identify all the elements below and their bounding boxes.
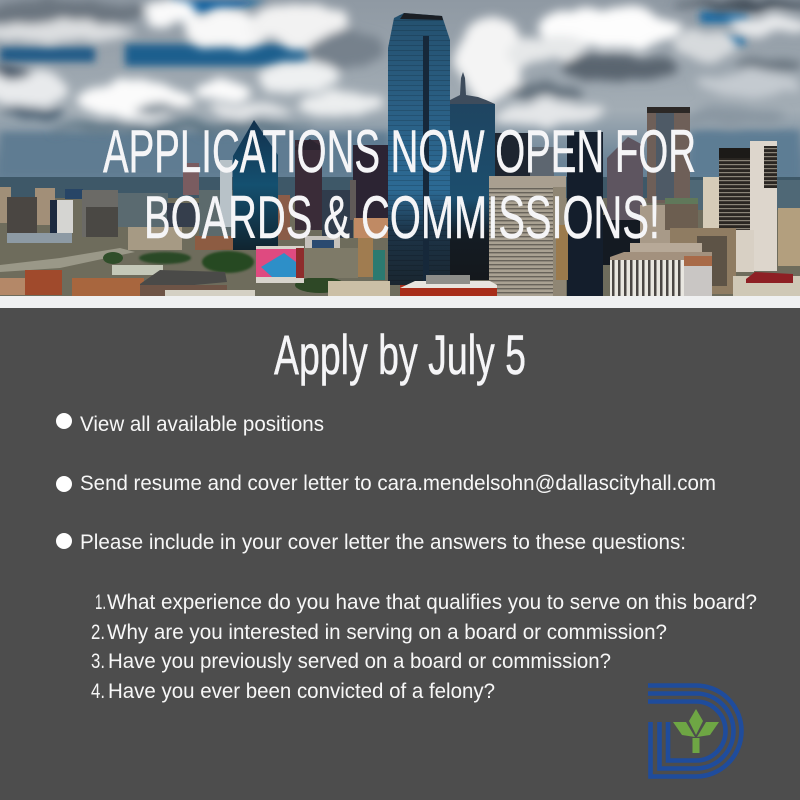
Fountain Place glass tower xyxy=(233,120,278,250)
question 1: 1. xyxy=(95,591,106,614)
distant city haze xyxy=(0,177,800,198)
title xyxy=(103,118,696,251)
logo leaves xyxy=(673,709,719,753)
header photo: Dallas skyline xyxy=(0,0,800,296)
light divider strip xyxy=(0,296,800,308)
tan grid tower xyxy=(489,176,568,296)
white striped tower xyxy=(719,141,800,271)
bullet 3: Please include in your cover letter the answers to these questions: xyxy=(80,531,686,554)
question 3: Have you previously served on a board or commission? xyxy=(108,650,611,673)
numbered questions xyxy=(91,591,757,703)
question 2: 2. xyxy=(91,621,105,644)
logo D stripes xyxy=(648,686,742,776)
red roof buildings xyxy=(400,272,800,296)
main glass tower xyxy=(388,13,450,285)
question 1: What experience do you have that qualifies you to serve on this board? xyxy=(107,591,757,614)
second glass tower with spire xyxy=(450,72,495,280)
question 3: 3. xyxy=(91,650,105,673)
highway and trees xyxy=(0,248,345,293)
question 4: 4. xyxy=(91,680,105,703)
question 2: Why are you interested in serving on a board or commission? xyxy=(107,621,667,644)
left skyline buildings xyxy=(0,160,235,250)
bullet 1: View all available positions xyxy=(80,413,324,436)
tan mid-rise buildings xyxy=(670,228,754,294)
bullet list xyxy=(56,413,716,554)
front striped building xyxy=(610,243,712,296)
subheading: Apply by July 5 xyxy=(274,323,526,386)
right-centre background towers xyxy=(495,107,800,296)
question 4: Have you ever been convicted of a felony? xyxy=(108,680,495,703)
sky and clouds xyxy=(0,0,800,177)
ground xyxy=(0,198,800,296)
central dark towers xyxy=(278,139,388,280)
icon: City of Dallas logo xyxy=(648,686,742,776)
foreground low rooftops xyxy=(0,265,390,296)
billboard building xyxy=(256,246,304,283)
bullet 2: Send resume and cover letter to cara.mendelsohn@dallascityhall.com xyxy=(80,472,716,495)
